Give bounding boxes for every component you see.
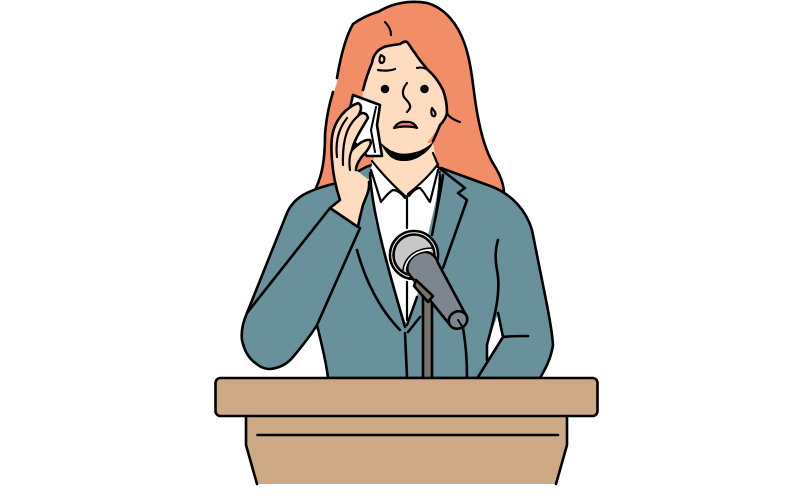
tissue <box>345 95 382 156</box>
lower jacket front <box>405 317 467 377</box>
face <box>360 42 460 153</box>
white gap between arm and torso <box>487 313 503 361</box>
podium top <box>216 378 598 416</box>
mic stand <box>423 296 432 379</box>
eyebrows <box>378 68 428 71</box>
jacket <box>242 165 553 378</box>
neck <box>373 143 437 195</box>
shirt collar <box>371 153 438 202</box>
hair <box>316 2 504 194</box>
hand <box>330 103 371 227</box>
white shirt <box>370 160 440 327</box>
neck shadow <box>380 141 434 161</box>
microphone <box>390 231 470 379</box>
lapel <box>432 167 467 268</box>
mic head <box>390 231 438 279</box>
mic clip <box>414 280 433 302</box>
sweat drops <box>431 108 435 116</box>
podium base <box>246 416 567 484</box>
mic handle <box>407 252 467 325</box>
eyes <box>381 85 389 93</box>
mouth <box>394 122 417 128</box>
nose <box>403 83 410 112</box>
